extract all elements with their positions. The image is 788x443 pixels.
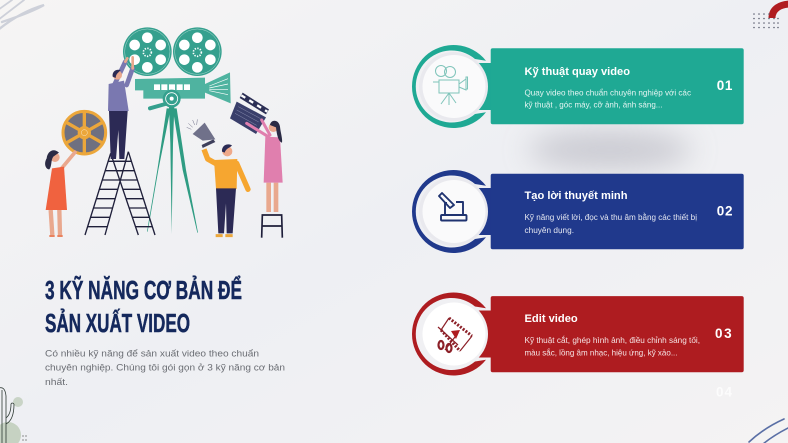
person on ladder [108,57,133,159]
title [45,275,242,338]
card 03 description [524,335,700,358]
man in yellow shirt [204,144,248,236]
icon: film camera outline [433,66,468,105]
decoration: top-left brush strokes [0,0,44,30]
camera reel left [123,27,172,76]
faint number 04: 04 [716,385,732,400]
title: 3 KỸ NĂNG CƠ BẢN ĐỂ [45,275,242,305]
woman in orange dress [45,150,75,236]
decoration: cactus bottom-left [0,388,27,443]
megaphone [187,119,215,148]
card 02 badge [412,170,744,253]
camera body [135,78,205,99]
card 02 description: chuyên dụng. [524,225,574,235]
intro paragraph: Có nhiều kỹ năng để sản xuất video theo chuẩn [45,348,259,359]
panel: card 01 camera technique [412,45,744,128]
card 01 badge [412,45,744,128]
card 03 description: Kỹ thuật cắt, ghép hình ảnh, điều chỉnh sáng tối, [524,335,700,345]
clapperboard [230,93,269,134]
card 03 badge [412,292,744,376]
icon: film strip and scissors [438,318,472,352]
yellow film reel [63,111,106,154]
illustration: film crew around camera [45,27,283,238]
card 03 number: 03 [715,326,732,341]
card 03 description: màu sắc, lồng âm nhạc, hiệu ứng, kỹ xảo... [524,348,678,358]
card 01 heading: Kỹ thuật quay video [524,66,630,78]
card 01 number: 01 [717,78,733,93]
intro paragraph [45,348,285,387]
icon: microphone stand [439,193,466,220]
film camera [123,27,231,108]
title: SẢN XUẤT VIDEO [45,308,190,338]
panel: card 03 video editing [412,292,744,376]
intro paragraph: nhất. [45,376,68,387]
card 01 description [524,88,691,110]
card 02 description: Kỹ năng viết lời, đọc và thu âm bằng các thiết bị [524,212,697,222]
card 01 description: Quay video theo chuẩn chuyên nghiệp với các [524,88,691,98]
panel: card 02 voice-over [412,170,744,253]
stepladder [85,152,155,235]
decoration: top-right red arc and dots [753,4,788,28]
camera lens hood [205,72,231,103]
card 02 number: 02 [717,204,732,219]
soft shadow under first card [528,130,692,170]
camera reel right [173,27,222,76]
tripod [147,107,198,234]
intro paragraph: chuyên nghiệp. Chúng tôi gói gọn ở 3 kỹ năng cơ bản [45,362,285,373]
woman in pink dress [247,120,283,238]
decoration: bottom-right blue strokes [749,419,788,443]
camera mount and handle [163,90,181,108]
card 03 heading: Edit video [524,313,578,325]
card 02 heading: Tạo lời thuyết minh [524,190,628,202]
card 01 description: kỹ thuật , góc máy, cỡ ảnh, ánh sáng... [524,100,662,110]
card 02 description [524,212,697,235]
